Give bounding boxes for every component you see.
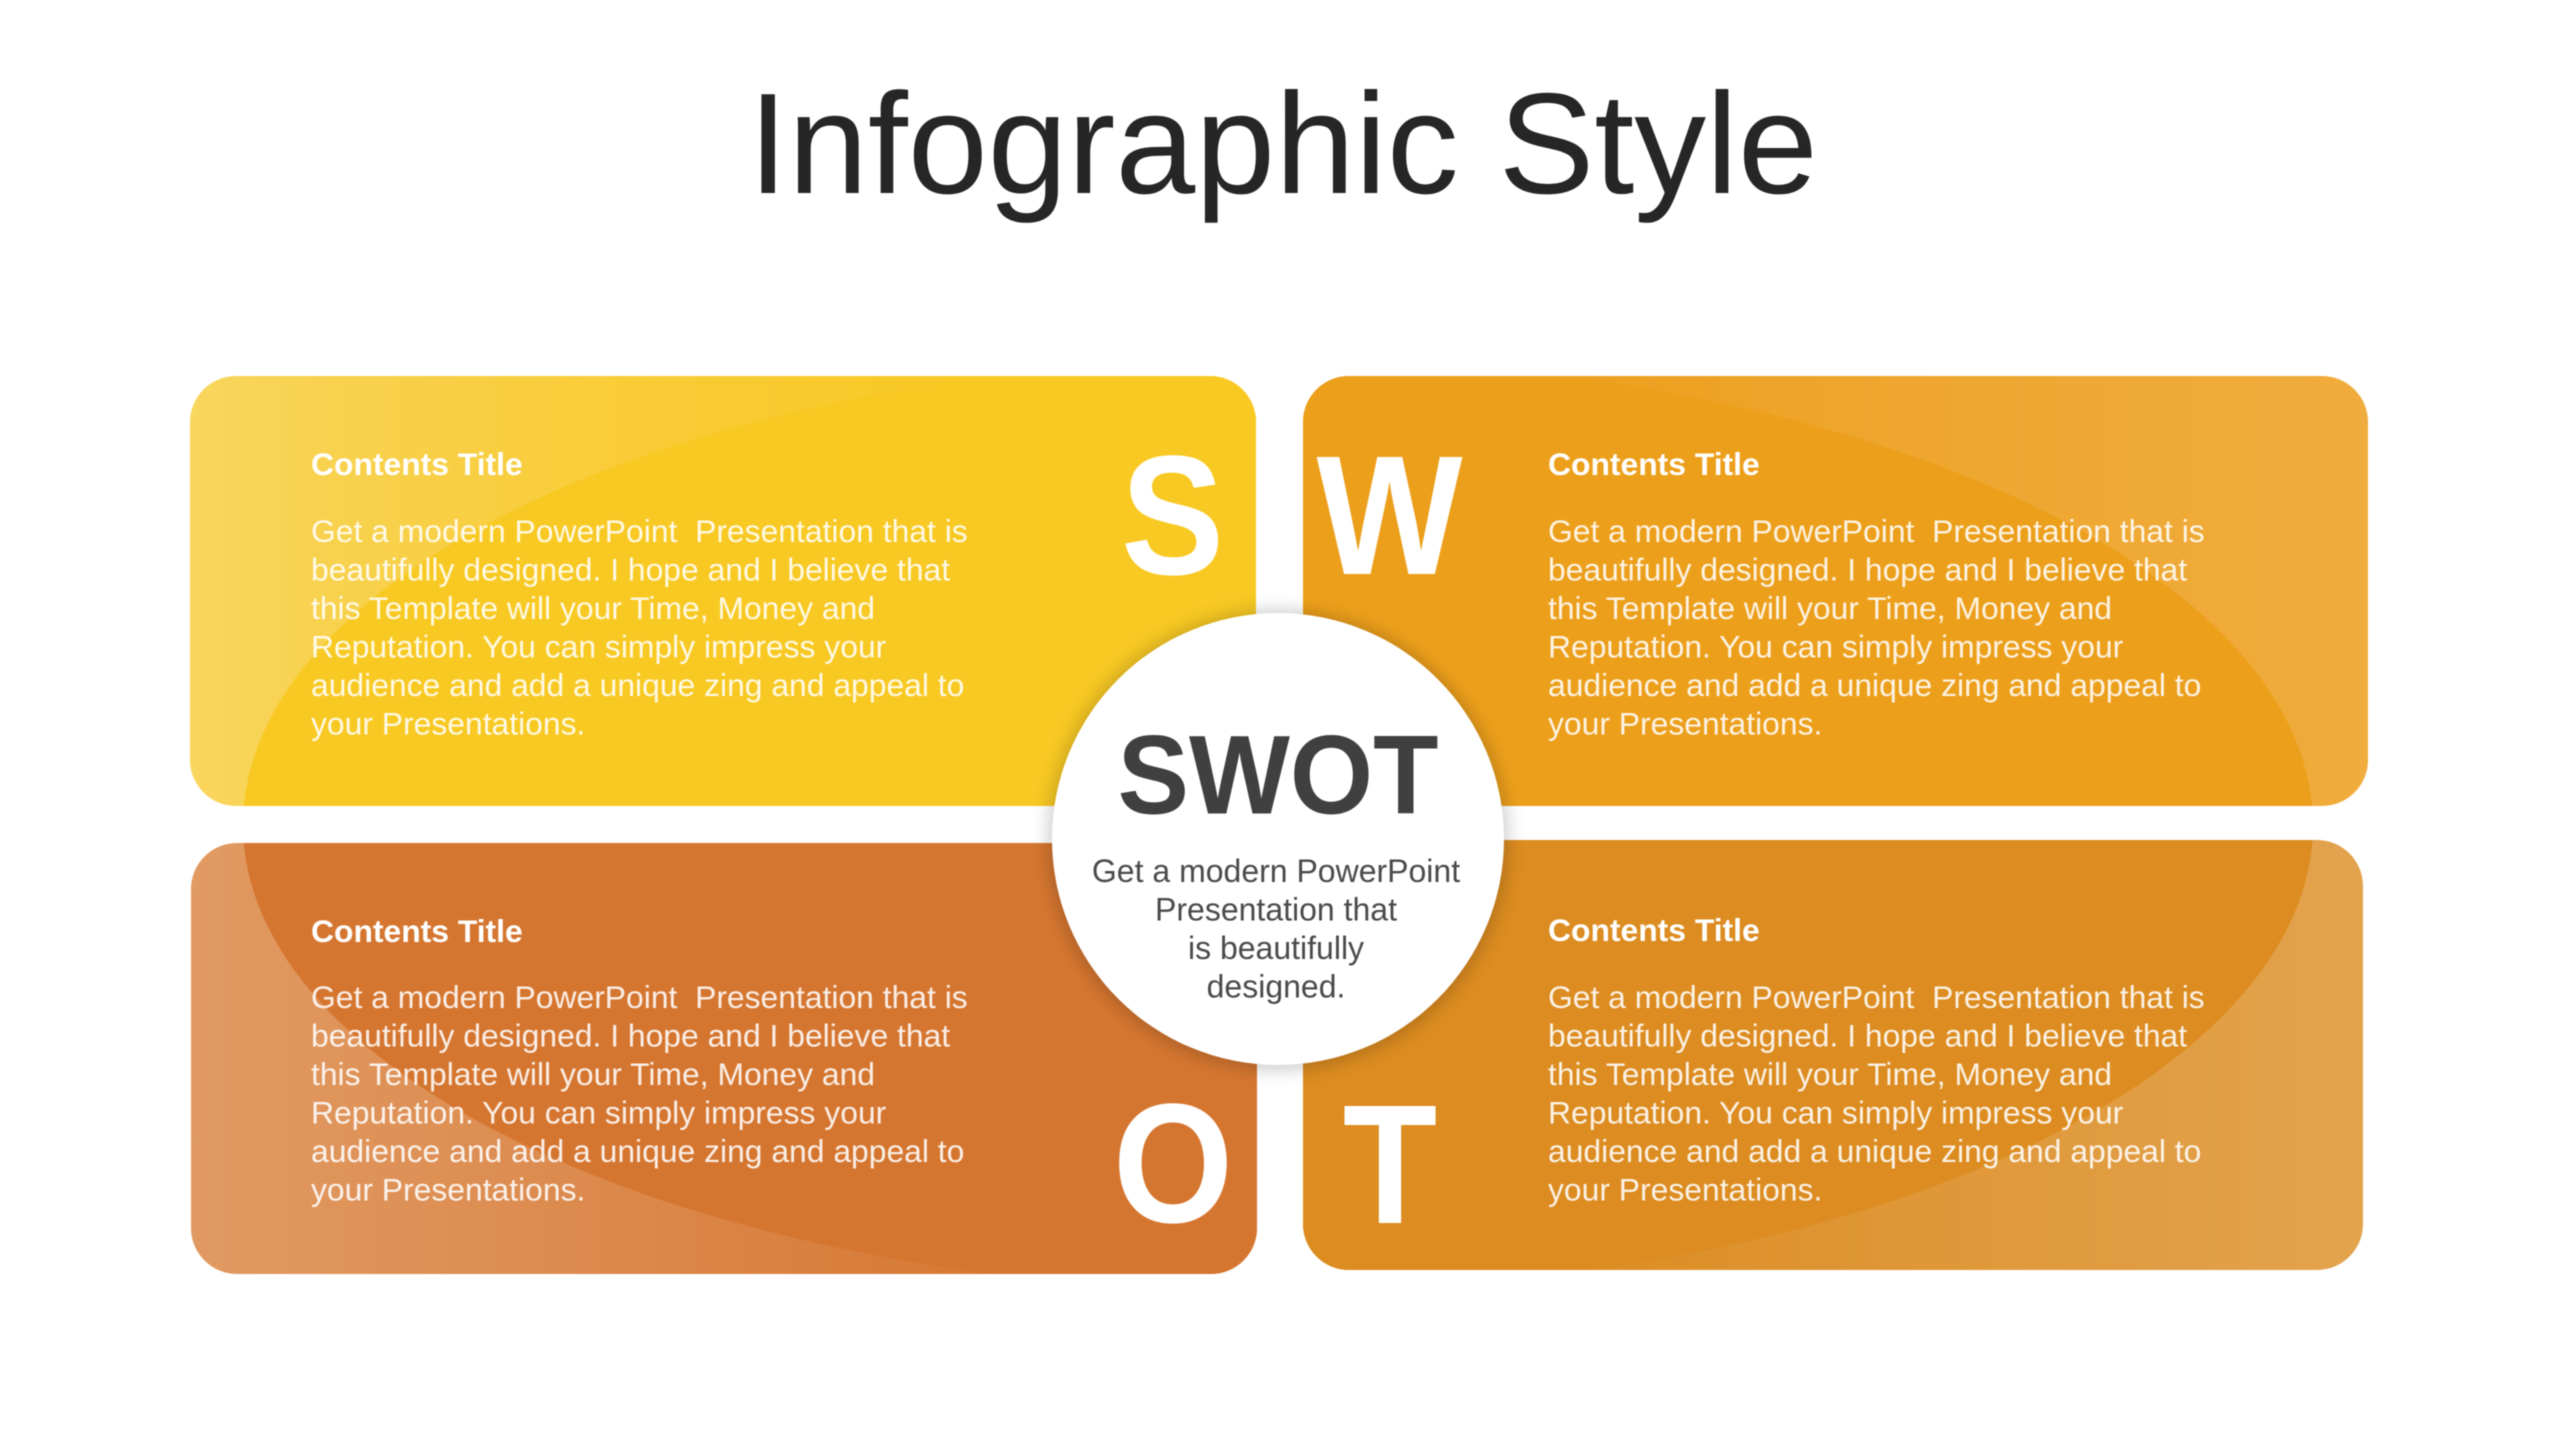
text block: weaknesses: this Template will your Time, Money and — [1548, 590, 2112, 626]
text block: opportunities: Get a modern PowerPoint Presentation that is — [311, 979, 968, 1015]
panel: strengths — [189, 375, 1257, 807]
center circle — [1047, 609, 1509, 1071]
text block: opportunities: this Template will your Time, Money and — [311, 1056, 875, 1092]
text block: strengths: Get a modern PowerPoint Presentation that is — [311, 513, 968, 549]
title: Infographic Style — [748, 64, 1818, 224]
text block: threats: beautifully designed. I hope and I believe that — [1548, 1018, 2187, 1054]
heading: threats: Contents Title — [1548, 912, 1760, 948]
letter S: S — [1121, 421, 1224, 611]
letter W: W — [1316, 421, 1463, 611]
text block: weaknesses: Get a modern PowerPoint Presentation that is — [1548, 513, 2205, 549]
panel: threats — [1302, 839, 2364, 1271]
text block: threats: Reputation. You can simply impress your — [1548, 1094, 2124, 1130]
text block: weaknesses: Reputation. You can simply impress your — [1548, 628, 2124, 664]
text block: center description: Get a modern PowerPoint — [1092, 853, 1460, 889]
text block: threats: Get a modern PowerPoint Presentation that is — [1548, 979, 2205, 1015]
panel: weaknesses — [1302, 375, 2369, 807]
text block: center description: Presentation that — [1155, 892, 1397, 928]
letter O: O — [1113, 1069, 1233, 1259]
panel: opportunities — [190, 842, 1258, 1275]
text block: strengths: beautifully designed. I hope and I believe that — [311, 552, 950, 588]
text block: threats: audience and add a unique zing and appeal to — [1548, 1133, 2201, 1169]
text block: center description: is beautifully — [1188, 930, 1364, 966]
text block: opportunities: audience and add a unique zing and appeal to — [311, 1133, 964, 1169]
text block: weaknesses: your Presentations. — [1548, 706, 1822, 742]
text block: opportunities: Reputation. You can simply impress your — [311, 1094, 887, 1130]
text block: strengths: audience and add a unique zing and appeal to — [311, 667, 964, 703]
heading: SWOT: SWOT — [1118, 713, 1438, 838]
heading: opportunities: Contents Title — [311, 913, 523, 949]
heading: weaknesses: Contents Title — [1548, 446, 1760, 482]
text block: opportunities: beautifully designed. I hope and I believe that — [311, 1018, 950, 1054]
text block: opportunities: your Presentations. — [311, 1172, 585, 1208]
text block: threats: your Presentations. — [1548, 1172, 1822, 1208]
letter T: T — [1343, 1070, 1437, 1260]
text block: center description: designed. — [1207, 968, 1345, 1004]
heading: strengths: Contents Title — [311, 446, 523, 482]
text block: weaknesses: audience and add a unique zing and appeal to — [1548, 667, 2201, 703]
text block: threats: this Template will your Time, Money and — [1548, 1056, 2112, 1092]
text block: weaknesses: beautifully designed. I hope and I believe that — [1548, 552, 2187, 588]
text block: strengths: Reputation. You can simply impress your — [311, 628, 887, 664]
text block: strengths: your Presentations. — [311, 706, 585, 742]
text block: strengths: this Template will your Time, Money and — [311, 590, 875, 626]
